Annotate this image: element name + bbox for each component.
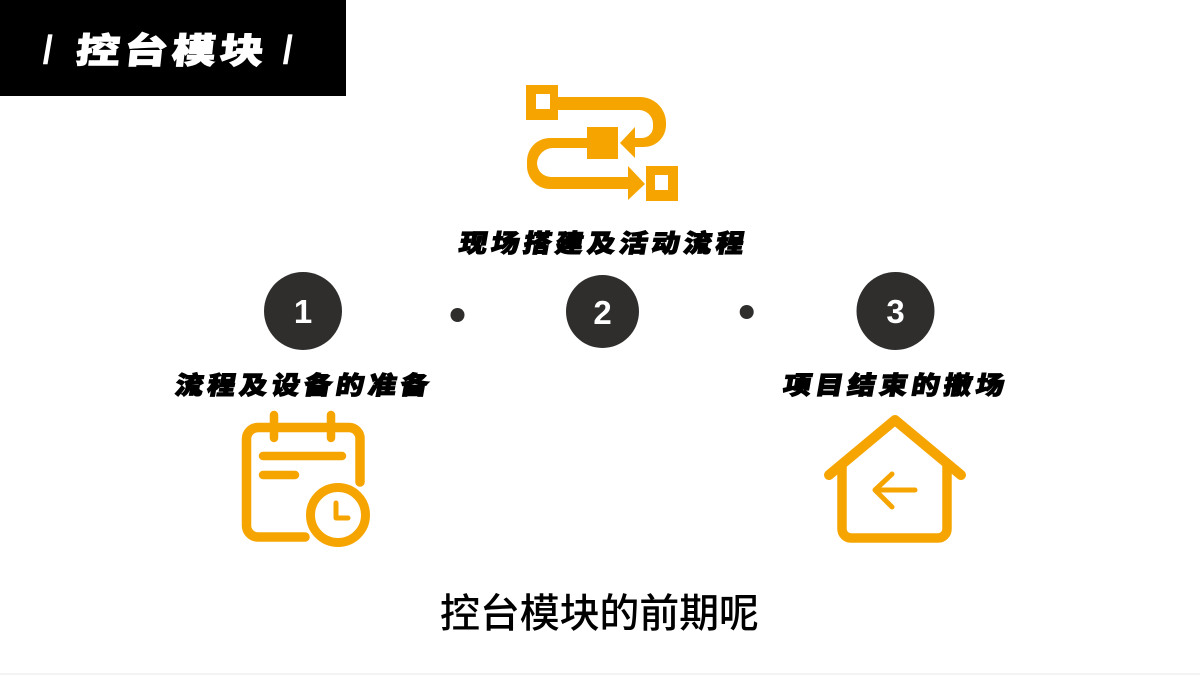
step 1 badge	[264, 272, 342, 350]
title slash right: /	[284, 31, 292, 70]
icon: calendar with clock	[246, 415, 366, 542]
caption: 控台模块的前期呢	[440, 581, 759, 639]
connector dot 2	[740, 305, 754, 319]
heading: step 3: 项目结束的撤场	[781, 365, 1008, 401]
step 2 badge: 2	[593, 294, 612, 331]
step 3 badge	[856, 272, 934, 350]
step 3 badge: 3	[886, 293, 905, 330]
step 1 badge: 1	[294, 293, 312, 330]
heading: step 2: 现场搭建及活动流程	[457, 223, 748, 259]
heading: step 1: 流程及设备的准备	[173, 365, 433, 401]
title slash left: /	[44, 31, 52, 70]
icon: workflow	[526, 85, 678, 201]
title banner	[0, 0, 346, 96]
icon: house with return arrow	[829, 420, 961, 538]
step 2 badge	[566, 275, 639, 348]
title text: 控台模块	[74, 23, 267, 74]
connector dot 1	[450, 308, 464, 322]
